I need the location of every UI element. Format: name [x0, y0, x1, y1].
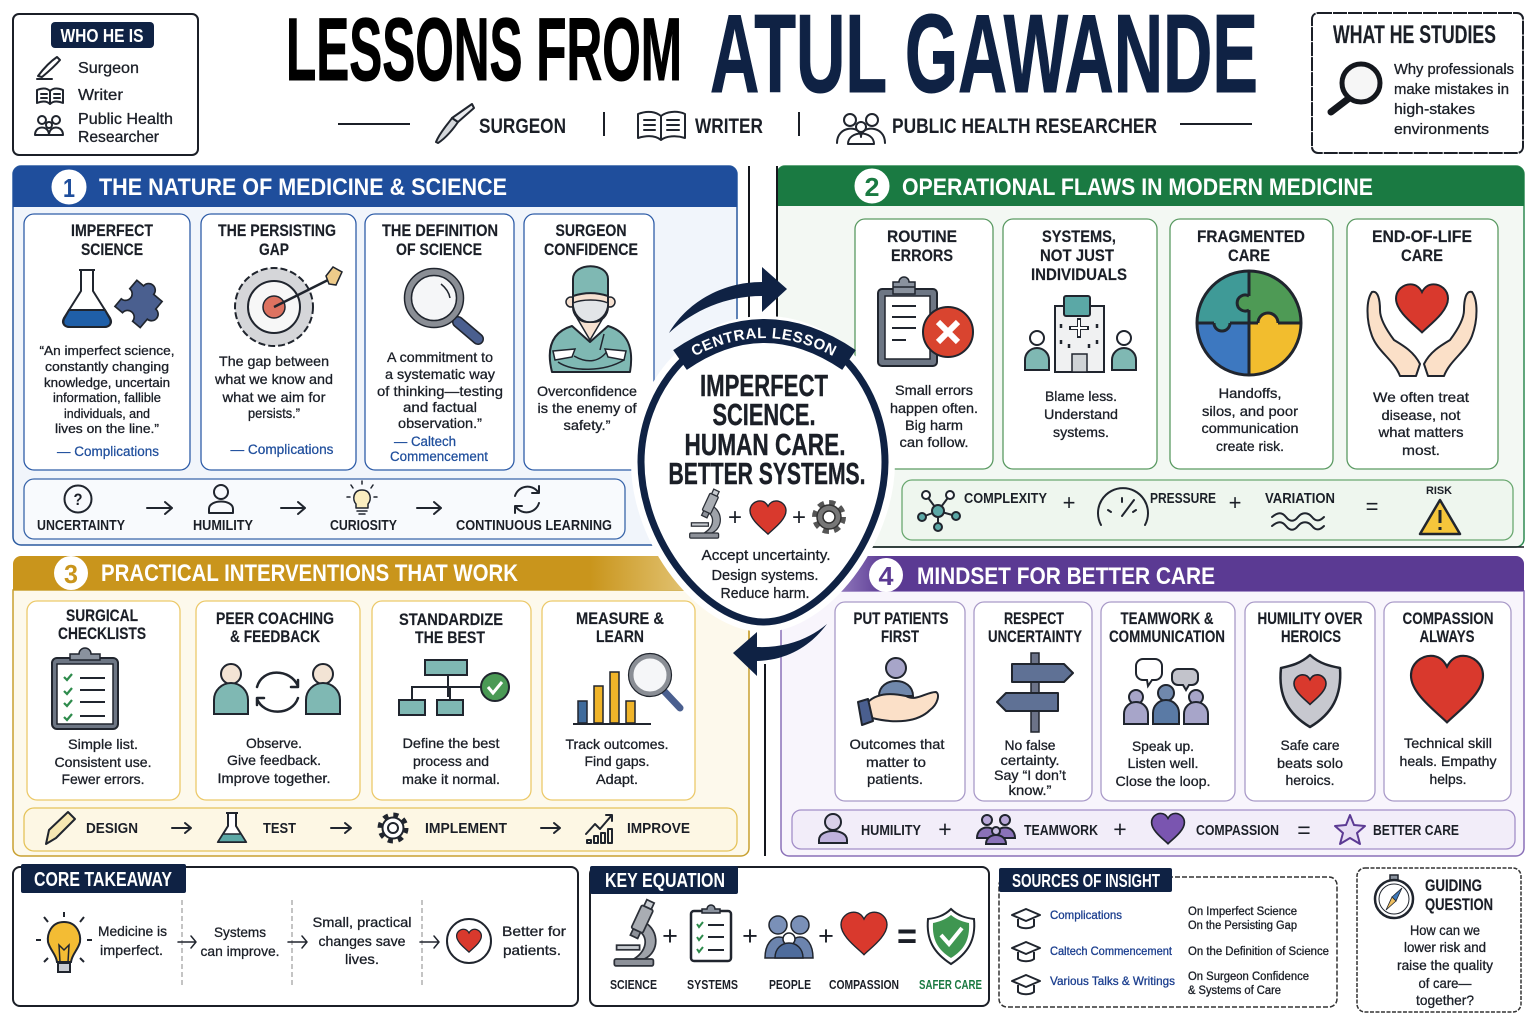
card: surgeon confidence: [524, 214, 654, 470]
card: peer coaching and feedback: Improve together.: [218, 770, 330, 786]
card: the definition of science: observation.”: [398, 415, 482, 431]
central statement: HUMAN CARE.: [684, 427, 846, 462]
card: peer coaching and feedback: & FEEDBACK: [230, 628, 320, 646]
panel: who he is: Public Health: [78, 111, 173, 128]
card: humility over heroics: Safe care: [1280, 737, 1340, 753]
card: standardize the best: STANDARDIZE: [399, 611, 503, 629]
panel: key equation: SAFER CARE: [919, 978, 982, 992]
card: imperfect science: — Complications: [57, 444, 159, 459]
card: compassion always: Technical skill: [1404, 735, 1492, 751]
panel: core takeaway: can improve.: [200, 943, 280, 959]
card: compassion always: ALWAYS: [1420, 628, 1474, 646]
panel: core takeaway: Medicine is: [98, 923, 167, 939]
central actions: Accept uncertainty.: [702, 547, 830, 564]
panel: sources of insight: SOURCES OF INSIGHT: [1012, 871, 1160, 891]
card: imperfect science: “An imperfect science,: [40, 343, 174, 358]
card: the persisting gap: persists.”: [248, 405, 300, 421]
central statement: SCIENCE.: [712, 397, 816, 432]
card: teamwork and communication: [1101, 602, 1235, 801]
card: systems not just individuals: SYSTEMS,: [1042, 228, 1116, 246]
panel: key equation: SCIENCE: [610, 978, 657, 992]
card: respect uncertainty: RESPECT: [1004, 610, 1064, 628]
central lesson banner: CENTRAL LESSON: [692, 328, 837, 356]
badge 3: 3: [64, 559, 78, 589]
equation icons: +: [662, 921, 678, 951]
heading 2: OPERATIONAL FLAWS IN MODERN MEDICINE: [902, 174, 1373, 201]
card: humility over heroics: heroics.: [1286, 772, 1334, 788]
card: fragmented care: create risk.: [1216, 438, 1284, 454]
card: put patients first: Outcomes that: [850, 736, 945, 752]
arrow: top cycle: [669, 267, 787, 333]
card: respect uncertainty: No false: [1004, 737, 1056, 753]
card: the definition of science: [365, 214, 514, 470]
card: compassion always: [1384, 602, 1511, 801]
card: the definition of science: THE DEFINITION: [382, 222, 498, 240]
panel: sources of insight: Various Talks & Writings: [1050, 974, 1175, 988]
card: surgical checklists: [27, 601, 180, 800]
strip: complexity plus pressure plus variation equals risk: +: [1229, 490, 1241, 515]
card: the definition of science: A commitment to: [387, 349, 493, 365]
heading 1: THE NATURE OF MEDICINE & SCIENCE: [99, 174, 507, 201]
strip: uncertainty to continuous learning: HUMILITY: [193, 518, 253, 534]
badge 4: 4: [878, 561, 894, 591]
card: end-of-life care: what matters: [1377, 424, 1464, 440]
card: peer coaching and feedback: Give feedback.: [227, 752, 321, 768]
arrow: bottom cycle: [733, 624, 827, 676]
card: fragmented care: [1170, 219, 1333, 469]
card: measure and learn: Find gaps.: [584, 753, 650, 769]
strip: complexity plus pressure plus variation equals risk: VARIATION: [1265, 491, 1335, 507]
card: standardize the best: Define the best: [402, 735, 500, 751]
central statement: [668, 368, 866, 491]
panel: key equation: KEY EQUATION: [605, 870, 725, 892]
panel: guiding question: raise the quality: [1397, 957, 1493, 973]
strip: design test implement improve: IMPROVE: [627, 821, 690, 837]
card: routine errors: [855, 219, 993, 469]
card: surgeon confidence: safety.”: [564, 417, 611, 433]
card: measure and learn: Track outcomes.: [566, 736, 668, 752]
card: imperfect science: [24, 214, 190, 470]
card: humility over heroics: HUMILITY OVER: [1258, 610, 1363, 628]
strip: uncertainty to continuous learning: CONTINUOUS LEARNING: [456, 518, 612, 534]
equation icons: +: [742, 921, 758, 951]
panel: who he is: [13, 14, 198, 155]
card: standardize the best: make it normal.: [402, 771, 500, 787]
central lesson banner: [673, 319, 856, 370]
card: routine errors: happen often.: [890, 400, 978, 416]
panel: who he is: Writer: [78, 87, 124, 104]
panel: sources of insight: Caltech Commencement: [1050, 944, 1173, 958]
card: standardize the best: [372, 601, 531, 800]
icon: light bulb: [36, 912, 92, 972]
strip: humility plus teamwork plus compassion equals better care: COMPASSION: [1196, 823, 1279, 839]
panel 3: practical interventions that work: [13, 556, 749, 856]
panel 2: operational flaws in modern medicine: [777, 166, 1524, 547]
card: humility over heroics: HEROICS: [1281, 628, 1341, 646]
strip: uncertainty to continuous learning: [24, 479, 625, 539]
card: compassion always: helps.: [1430, 771, 1466, 787]
card: the definition of science: a systematic way: [385, 366, 495, 382]
card: respect uncertainty: certainty.: [1000, 752, 1060, 768]
card: put patients first: matter to: [866, 754, 926, 770]
card: measure and learn: [542, 601, 695, 800]
central icons: science plus heart plus gear: +: [728, 504, 742, 531]
card: measure and learn: MEASURE &: [576, 610, 664, 628]
card: surgeon confidence: CONFIDENCE: [544, 241, 638, 259]
card: fragmented care: silos, and poor: [1202, 403, 1298, 419]
card: surgical checklists: Fewer errors.: [62, 771, 144, 787]
badge 2: [854, 168, 890, 204]
heading 3: PRACTICAL INTERVENTIONS THAT WORK: [101, 560, 519, 587]
card: surgical checklists: SURGICAL: [66, 607, 138, 625]
central actions: Design systems.: [712, 567, 818, 584]
card: surgeon confidence: is the enemy of: [538, 400, 637, 416]
panel: guiding question: How can we: [1410, 922, 1480, 938]
card: the definition of science: — Caltech: [394, 434, 456, 449]
panel: key equation: [590, 866, 989, 1006]
card: the persisting gap: GAP: [259, 241, 289, 259]
panel: guiding question: of care—: [1418, 975, 1472, 991]
card: the persisting gap: what we know and: [214, 371, 333, 387]
panel: core takeaway: imperfect.: [100, 942, 163, 958]
subtitle roles row: PUBLIC HEALTH RESEARCHER: [892, 115, 1157, 138]
card: respect uncertainty: know.”: [1008, 782, 1052, 798]
card: respect uncertainty: [974, 602, 1092, 801]
strip: complexity plus pressure plus variation equals risk: RISK: [1426, 485, 1452, 497]
panel: guiding question: [1357, 868, 1521, 1012]
card: respect uncertainty: UNCERTAINTY: [988, 628, 1082, 646]
panel: sources of insight: [999, 868, 1337, 1007]
card: put patients first: PUT PATIENTS: [854, 610, 948, 628]
card: systems not just individuals: Understand: [1044, 406, 1118, 422]
card: compassion always: COMPASSION: [1402, 610, 1494, 628]
panel: sources of insight: On Imperfect Science: [1188, 906, 1297, 918]
strip: humility plus teamwork plus compassion equals better care: =: [1297, 817, 1311, 843]
panel: core takeaway: Better for: [502, 923, 566, 939]
card: imperfect science: IMPERFECT: [71, 222, 153, 240]
strip: uncertainty to continuous learning: CURIOSITY: [330, 518, 397, 534]
panel: sources of insight: On the Persisting Gap: [1188, 920, 1297, 932]
card: systems not just individuals: NOT JUST: [1040, 247, 1114, 265]
card: end-of-life care: most.: [1402, 442, 1440, 458]
panel: guiding question: QUESTION: [1425, 896, 1493, 914]
panel: sources of insight: On Surgeon Confidence: [1188, 971, 1309, 983]
strip: uncertainty to continuous learning: UNCERTAINTY: [37, 518, 125, 534]
panel: core takeaway: CORE TAKEAWAY: [34, 869, 173, 891]
card: end-of-life care: disease, not: [1382, 407, 1461, 423]
title: LESSONS FROM: [286, 0, 682, 99]
central statement: IMPERFECT: [700, 368, 828, 403]
strip: humility plus teamwork plus compassion equals better care: +: [938, 816, 952, 842]
strip: design test implement improve: IMPLEMENT: [425, 821, 507, 837]
panel: what he studies: high-stakes: [1394, 101, 1475, 118]
card: fragmented care: FRAGMENTED: [1197, 228, 1305, 246]
card: routine errors: ROUTINE: [887, 228, 957, 246]
card: surgeon confidence: SURGEON: [556, 222, 626, 240]
card: end-of-life care: END-OF-LIFE: [1372, 228, 1472, 246]
strip: complexity plus pressure plus variation equals risk: COMPLEXITY: [964, 491, 1047, 507]
card: imperfect science: constantly changing: [45, 359, 169, 374]
strip: design test implement improve: TEST: [263, 821, 296, 837]
card: standardize the best: THE BEST: [415, 629, 485, 647]
card: humility over heroics: beats solo: [1277, 755, 1343, 771]
panel: what he studies: make mistakes in: [1394, 81, 1509, 98]
card: fragmented care: CARE: [1228, 247, 1270, 265]
strip: complexity plus pressure plus variation equals risk: +: [1063, 490, 1075, 515]
card: routine errors: ERRORS: [891, 247, 953, 265]
badge 1: [51, 169, 87, 205]
card: measure and learn: Adapt.: [596, 771, 638, 787]
panel: guiding question: GUIDING: [1425, 877, 1482, 895]
strip: humility plus teamwork plus compassion equals better care: TEAMWORK: [1024, 823, 1098, 839]
card: imperfect science: SCIENCE: [81, 241, 143, 259]
subtitle roles row: WRITER: [695, 115, 763, 138]
card: routine errors: can follow.: [900, 434, 968, 450]
strip: complexity plus pressure plus variation equals risk: PRESSURE: [1150, 491, 1216, 507]
panel: who he is: WHO HE IS: [60, 26, 144, 46]
equation icons: =: [897, 915, 917, 956]
central icons: science plus heart plus gear: +: [792, 504, 806, 531]
panel: key equation: SYSTEMS: [687, 978, 738, 992]
panel: core takeaway: changes save: [318, 933, 406, 949]
card: the definition of science: of thinking—testing: [377, 383, 503, 399]
card: the definition of science: and factual: [403, 399, 477, 415]
panel: what he studies: Why professionals: [1394, 61, 1514, 78]
card: standardize the best: process and: [413, 753, 489, 769]
card: systems not just individuals: [1003, 219, 1157, 469]
strip: design test implement improve: [24, 808, 737, 851]
subtitle roles row: SURGEON: [479, 115, 566, 138]
badge 4: [869, 558, 903, 592]
panel: guiding question: lower risk and: [1404, 939, 1486, 955]
panel: sources of insight: On the Definition of Science: [1188, 946, 1329, 958]
card: routine errors: Big harm: [905, 417, 963, 433]
strip: humility plus teamwork plus compassion equals better care: +: [1113, 816, 1127, 842]
panel: what he studies: [1312, 13, 1523, 153]
card: fragmented care: communication: [1202, 420, 1298, 436]
card: teamwork and communication: TEAMWORK &: [1120, 610, 1214, 628]
card: teamwork and communication: Speak up.: [1132, 738, 1194, 754]
panel: core takeaway: Small, practical: [312, 914, 412, 930]
panel: who he is: Surgeon: [78, 60, 139, 77]
strip: complexity plus pressure plus variation equals risk: =: [1366, 494, 1378, 519]
central actions: Reduce harm.: [720, 585, 810, 602]
card: surgeon confidence: Overconfidence: [537, 383, 637, 399]
panel: key equation: PEOPLE: [769, 978, 811, 992]
card: systems not just individuals: INDIVIDUALS: [1031, 266, 1127, 284]
subtitle roles row: [338, 104, 1252, 144]
card: imperfect science: information, fallible: [53, 390, 161, 405]
card: teamwork and communication: Close the loop.: [1116, 773, 1210, 789]
panel: core takeaway: lives.: [345, 951, 379, 967]
icon: heart in circle: [447, 919, 491, 963]
panel: core takeaway: [13, 864, 578, 1006]
central statement: BETTER SYSTEMS.: [668, 456, 866, 491]
card: the persisting gap: THE PERSISTING: [218, 222, 336, 240]
badge 3: [54, 556, 88, 590]
panel: sources of insight: Complications: [1050, 908, 1122, 922]
title: [286, 0, 1258, 116]
card: compassion always: heals. Empathy: [1400, 753, 1496, 769]
card: the definition of science: Commencement: [390, 449, 488, 464]
card: the persisting gap: The gap between: [219, 353, 329, 369]
equation icons: +: [818, 921, 834, 951]
panel 1: the nature of medicine and science: [13, 166, 737, 545]
card: teamwork and communication: COMMUNICATION: [1109, 628, 1225, 646]
card: teamwork and communication: Listen well.: [1128, 755, 1198, 771]
card: the persisting gap: — Complications: [230, 442, 334, 457]
central icons: science plus heart plus gear: [690, 488, 843, 538]
card: end-of-life care: We often treat: [1373, 389, 1469, 405]
strip: humility plus teamwork plus compassion equals better care: HUMILITY: [861, 823, 921, 839]
central actions: [702, 547, 830, 602]
icon: compass: [1375, 875, 1413, 918]
card: end-of-life care: CARE: [1401, 247, 1443, 265]
panel: core takeaway: patients.: [503, 942, 561, 958]
card: fragmented care: Handoffs,: [1218, 385, 1282, 401]
strip: uncertainty to continuous learning: ?: [74, 490, 82, 509]
card: peer coaching and feedback: PEER COACHING: [216, 610, 334, 628]
equation icons: [614, 899, 974, 966]
panel: core takeaway: Systems: [214, 924, 266, 940]
heading 4: MINDSET FOR BETTER CARE: [917, 563, 1215, 590]
vertical dividers between panels: [749, 166, 1524, 856]
panel: guiding question: together?: [1416, 992, 1474, 1008]
card: respect uncertainty: Say “I don’t: [994, 767, 1066, 783]
card: end-of-life care: [1347, 219, 1498, 469]
panel: key equation: COMPASSION: [829, 978, 899, 992]
card: the persisting gap: what we aim for: [221, 389, 326, 405]
strip: humility plus teamwork plus compassion equals better care: BETTER CARE: [1373, 823, 1459, 839]
card: put patients first: FIRST: [881, 628, 919, 646]
panel 4: mindset for better care: [781, 556, 1524, 856]
card: the definition of science: OF SCIENCE: [396, 241, 482, 259]
card: imperfect science: knowledge, uncertain: [44, 375, 170, 390]
panel: who he is: Researcher: [78, 129, 160, 146]
strip: humility plus teamwork plus compassion equals better care: [792, 810, 1515, 849]
strip: design test implement improve: DESIGN: [86, 821, 138, 837]
card: put patients first: patients.: [867, 771, 923, 787]
card: systems not just individuals: systems.: [1053, 424, 1109, 440]
card: imperfect science: individuals, and: [64, 406, 150, 421]
card: routine errors: Small errors: [895, 382, 973, 398]
badge 1: 1: [63, 173, 75, 203]
card: measure and learn: LEARN: [596, 628, 644, 646]
strip: complexity plus pressure plus variation equals risk: [902, 480, 1513, 540]
card: surgical checklists: Consistent use.: [54, 754, 152, 770]
card: put patients first: [835, 602, 965, 801]
card: peer coaching and feedback: [196, 601, 360, 800]
panel: what he studies: environments: [1394, 121, 1489, 138]
card: peer coaching and feedback: Observe.: [246, 735, 302, 751]
card: the persisting gap: [201, 214, 356, 470]
card: systems not just individuals: Blame less.: [1045, 388, 1117, 404]
card: surgical checklists: CHECKLISTS: [58, 625, 146, 643]
panel: sources of insight: & Systems of Care: [1188, 985, 1281, 997]
central lesson oval: [631, 316, 895, 631]
badge 2: 2: [864, 172, 880, 202]
card: humility over heroics: [1245, 602, 1375, 801]
card: surgical checklists: Simple list.: [68, 736, 138, 752]
card: imperfect science: lives on the line.”: [55, 421, 159, 436]
